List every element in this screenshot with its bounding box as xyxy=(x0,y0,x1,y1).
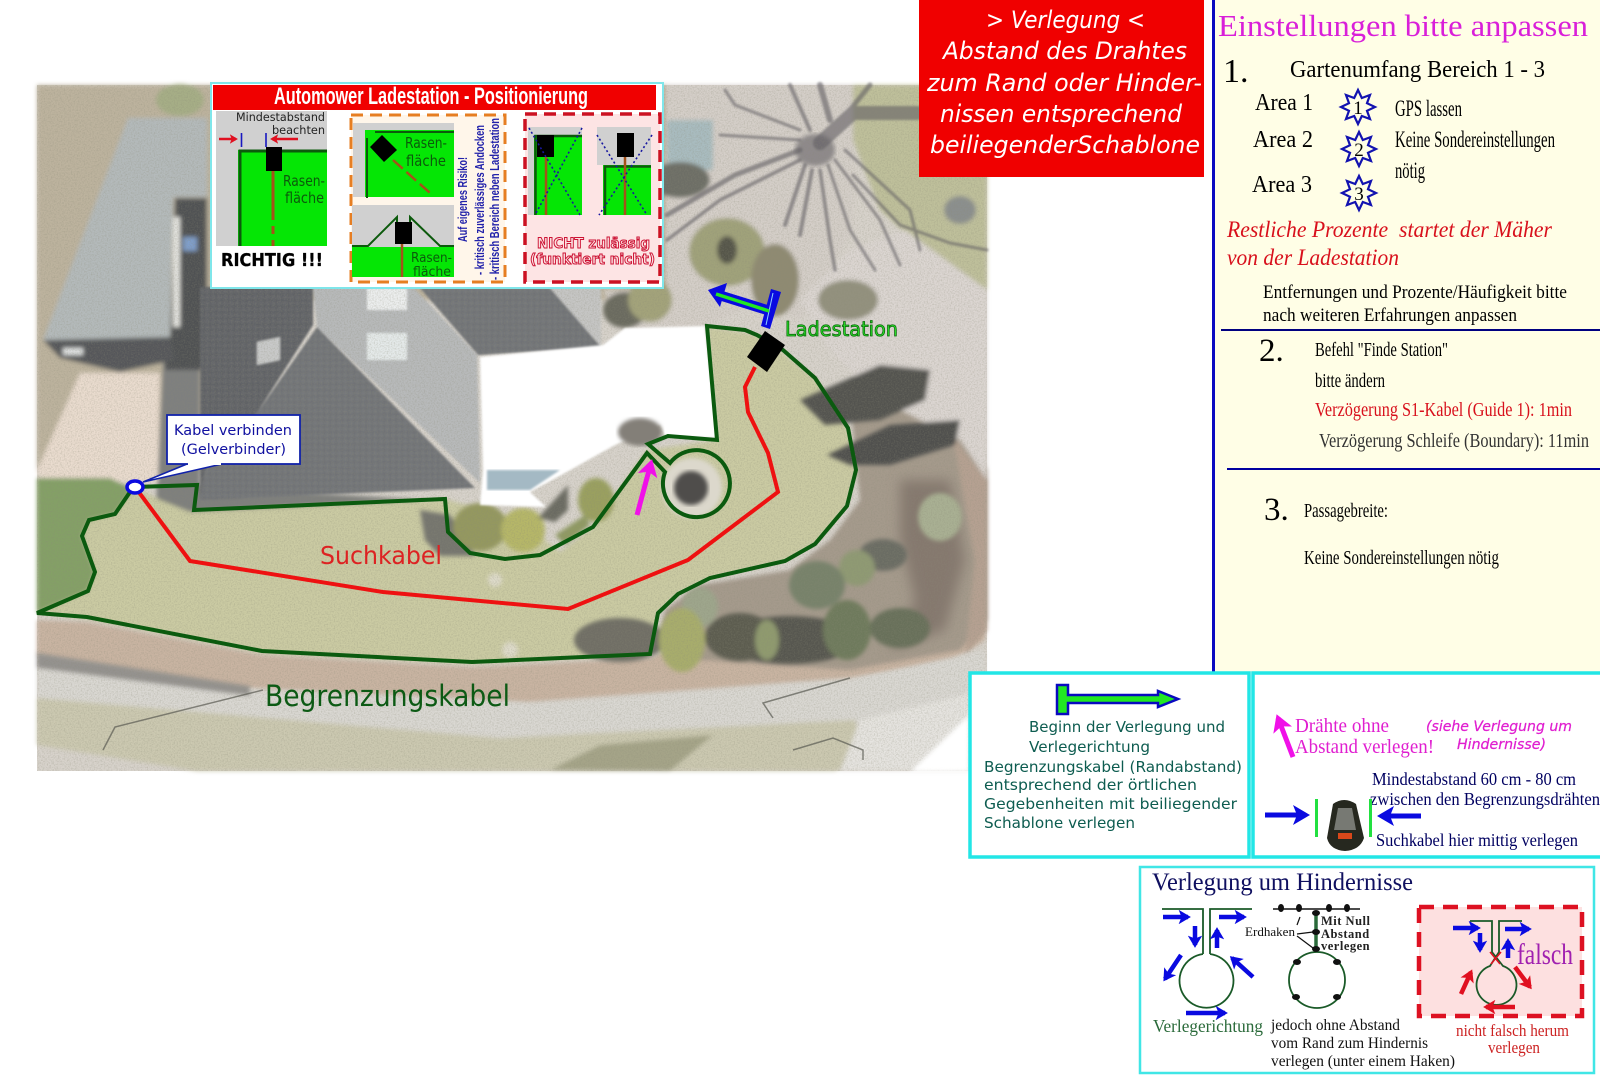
panel: laying start legend xyxy=(970,673,1249,857)
legend text: Beginn der Verlegung und xyxy=(1029,718,1225,736)
magenta arrow to obstacle xyxy=(637,463,651,515)
magenta arrow xyxy=(1278,718,1293,757)
diagram: risky placement: Auf eigenes Risiko! xyxy=(455,157,470,242)
diagram: not allowed placement xyxy=(525,114,660,282)
section 1: Gartenumfang xyxy=(1223,53,1567,326)
diagram: ground hooks: verlegen (unter einem Haken) xyxy=(1271,1053,1455,1070)
diagram: ground hooks: Abstand xyxy=(1321,927,1370,941)
legend text: Schablone verlegen xyxy=(984,814,1135,832)
label: Begrenzungskabel: Begrenzungskabel xyxy=(265,679,510,713)
diagram: not allowed placement: (funktiert nicht) xyxy=(530,252,655,268)
section 1: Gartenumfang: Restliche Prozente startet der Mäher xyxy=(1226,217,1553,242)
magenta note: Drähte ohne xyxy=(1295,715,1389,737)
diagram: correct placement: RICHTIG !!! xyxy=(221,250,323,271)
magenta note: (siehe Verlegung um xyxy=(1426,719,1572,735)
diagram: correct placement xyxy=(216,110,327,271)
diagram: risky placement xyxy=(351,115,505,282)
diagram: ground hooks: verlegen xyxy=(1321,939,1370,953)
red notice box: Verlegung: nissen entsprechend xyxy=(940,100,1183,128)
magenta note xyxy=(1295,715,1572,758)
panel: Automower Ladestation positioning xyxy=(211,83,663,288)
red notice box: Verlegung: > Verlegung < xyxy=(986,6,1145,34)
section 1: Gartenumfang: nötig xyxy=(1395,158,1425,183)
section 1: Gartenumfang: Entfernungen und Prozente/Häufigkeit bitte xyxy=(1263,282,1567,303)
diagram: risky placement: - kritisch Bereich neben Ladestation xyxy=(487,118,502,280)
section 1: Gartenumfang: GPS lassen xyxy=(1395,96,1462,121)
diagram: correct placement: Rasen- xyxy=(283,172,325,190)
section 3: Passagebreite xyxy=(1264,492,1499,569)
panel title bar: Automower Ladestation - Positionierung xyxy=(274,83,588,110)
section 1: Gartenumfang: 1. xyxy=(1223,53,1248,90)
diagram: ground hooks: Erdhaken xyxy=(1245,924,1295,939)
diagram: correct placement: beachten xyxy=(272,123,325,137)
cable connector marker xyxy=(127,481,143,493)
star badges 1-3: 3 xyxy=(1354,184,1364,205)
diagram: not allowed placement: NICHT zulässig xyxy=(537,236,650,252)
section 2: Finde Station xyxy=(1259,333,1589,452)
callout: Kabel verbinden: Kabel verbinden xyxy=(174,423,292,439)
diagram: wrong direction: falsch xyxy=(1517,938,1573,971)
diagram: risky placement: - kritisch zuverlässiges Andocken xyxy=(472,125,487,275)
diagram: ground hooks: jedoch ohne Abstand xyxy=(1270,1017,1400,1034)
guide cable (Suchkabel) xyxy=(135,367,778,609)
section 3: Passagebreite: Keine Sondereinstellungen nötig xyxy=(1304,547,1499,569)
red notice box: Verlegung: beiliegenderSchablone xyxy=(930,131,1200,159)
aerial photo of the garden xyxy=(37,84,987,772)
section 1: Gartenumfang: nach weiteren Erfahrungen anpassen xyxy=(1263,305,1517,326)
diagram: risky placement: fläche xyxy=(406,152,446,170)
icon: start arrow xyxy=(1057,685,1178,714)
red notice box: Verlegung: Abstand des Drahtes xyxy=(941,37,1187,65)
star badges 1-3: 2 xyxy=(1354,140,1364,161)
diagram: wrong direction xyxy=(1419,907,1582,1057)
panel: Einstellungen settings xyxy=(1212,0,1600,672)
section 2: Finde Station: Befehl "Finde Station" xyxy=(1315,339,1448,361)
section 1: Gartenumfang: Area 1 xyxy=(1255,90,1313,116)
panel: wire spacing xyxy=(1253,673,1600,857)
diagram: risky placement: fläche xyxy=(413,265,451,280)
legend text: entsprechend der örtlichen xyxy=(984,776,1197,794)
diagram: wrong direction: nicht falsch herum xyxy=(1456,1021,1569,1040)
section 1: Gartenumfang: von der Ladestation xyxy=(1227,245,1399,270)
charging station marker xyxy=(747,331,785,372)
legend text: Verlegerichtung xyxy=(1029,738,1150,756)
section 1: Gartenumfang: Area 2 xyxy=(1253,127,1313,153)
red notice box: Verlegung xyxy=(919,0,1204,177)
panel: Verlegung um Hindernisse xyxy=(1140,867,1594,1073)
callout: Kabel verbinden: (Gelverbinder) xyxy=(181,442,286,458)
spacing note: Suchkabel hier mittig verlegen xyxy=(1376,830,1578,850)
diagram: risky placement: Rasen- xyxy=(411,251,452,266)
spacing note: Mindestabstand 60 cm - 80 cm xyxy=(1372,769,1576,789)
boundary cable (Begrenzungskabel) xyxy=(37,326,856,662)
diagram: ground hooks: Mit Null xyxy=(1321,914,1371,928)
section 1: Gartenumfang: Area 3 xyxy=(1252,172,1312,198)
diagram: wrong direction: verlegen xyxy=(1488,1038,1540,1057)
diagram: ground hooks xyxy=(1245,904,1455,1070)
legend text: Gegebenheiten mit beiliegender xyxy=(984,795,1238,813)
magenta note: Hindernisse) xyxy=(1457,737,1546,753)
diagram: correct direction: Verlegerichtung xyxy=(1153,1016,1263,1036)
star badges 1-3 xyxy=(1341,90,1376,210)
callout: Kabel verbinden xyxy=(143,415,300,482)
section 2: Finde Station: 2. xyxy=(1259,333,1284,369)
section 1: Gartenumfang: Gartenumfang Bereich 1 - 3 xyxy=(1290,57,1545,83)
settings heading: Einstellungen bitte anpassen xyxy=(1218,8,1589,43)
label: Ladestation: Ladestation xyxy=(785,317,898,341)
diagram: ground hooks: vom Rand zum Hindernis xyxy=(1271,1035,1428,1052)
diagram: correct placement: Mindestabstand xyxy=(236,110,325,124)
section 3: Passagebreite: Passagebreite: xyxy=(1304,500,1388,522)
obstacle panel heading: Verlegung um Hindernisse xyxy=(1152,869,1413,896)
section 3: Passagebreite: 3. xyxy=(1264,492,1289,528)
icon: mower between wires xyxy=(1265,799,1421,851)
spacing note xyxy=(1370,769,1600,850)
magenta note: Abstand verlegen! xyxy=(1295,736,1434,758)
laying direction arrow at station xyxy=(708,283,781,329)
legend text xyxy=(984,718,1242,832)
label: Suchkabel: Suchkabel xyxy=(320,541,442,570)
star badges 1-3: 1 xyxy=(1353,98,1363,119)
diagram: risky placement: Rasen- xyxy=(405,134,447,152)
red notice box: Verlegung: zum Rand oder Hinder- xyxy=(926,69,1202,97)
section 2: Finde Station: bitte ändern xyxy=(1315,370,1385,392)
legend text: Begrenzungskabel (Randabstand) xyxy=(984,758,1242,776)
diagram: correct placement: fläche xyxy=(285,189,324,207)
diagram: correct direction xyxy=(1153,909,1263,1036)
